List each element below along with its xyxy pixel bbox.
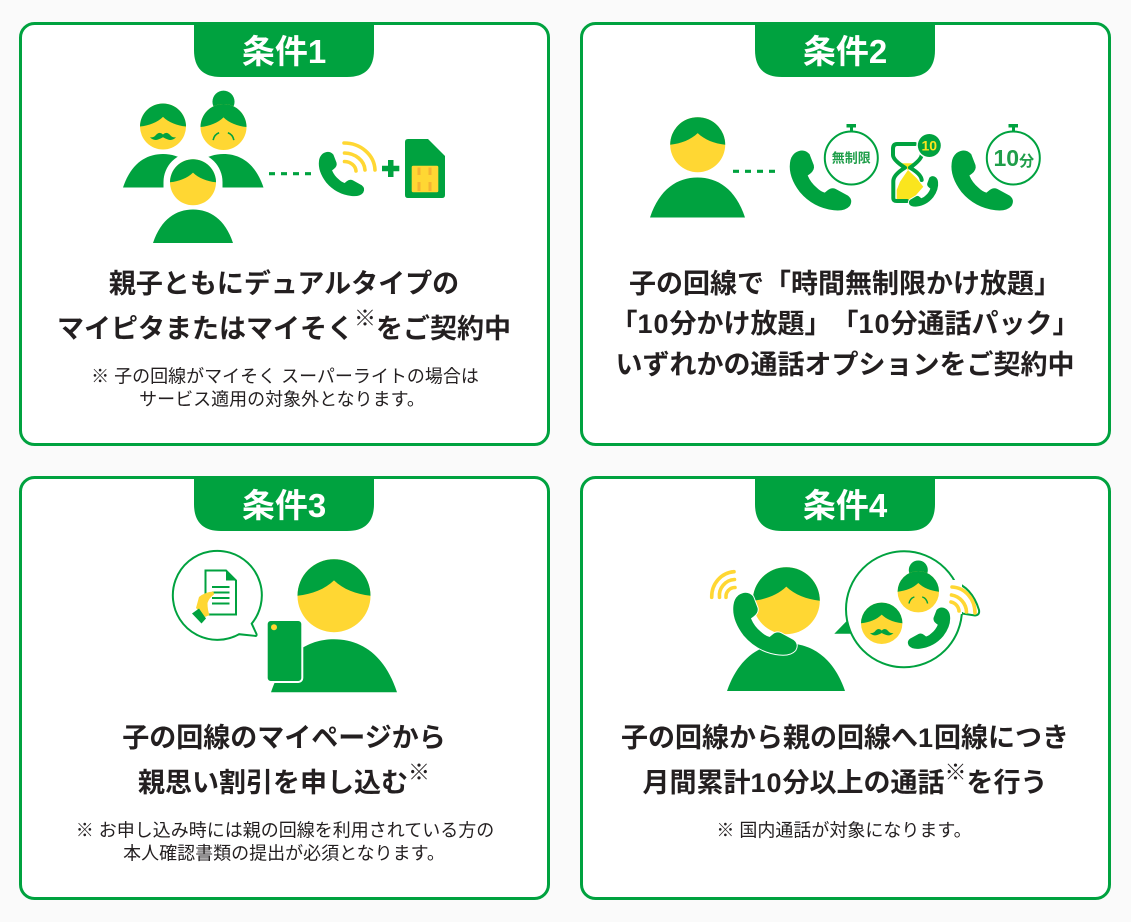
stopwatch: 10 minutes: [987, 124, 1040, 184]
heading: 「10分かけ放題」「10分通話パック」: [610, 309, 1080, 339]
dashed connector: [269, 172, 311, 175]
heading: 月間累計10分以上の通話: [642, 768, 945, 798]
panel: condition 1: [20, 23, 548, 444]
hand holding document: [192, 592, 214, 624]
note: ※ お申し込み時には親の回線を利用されている方の: [76, 820, 494, 840]
heading line 2: ※: [408, 760, 430, 785]
speech bubble: [834, 551, 979, 667]
signal waves: [344, 143, 375, 171]
phone: [790, 150, 851, 211]
mother head: [898, 560, 939, 612]
document: [206, 570, 236, 614]
heading: ※: [945, 760, 967, 785]
note: [76, 820, 494, 864]
tab: condition 3: [194, 477, 374, 531]
mother body: [184, 154, 264, 188]
icon: child with call options: [650, 117, 1040, 218]
speech bubble: [173, 551, 262, 640]
heading line 2: マイピタまたはマイそく: [57, 314, 354, 344]
dashed connector: [733, 170, 775, 173]
hourglass: 10 minutes: 10: [922, 138, 937, 154]
hourglass: 10 minutes: [893, 132, 942, 207]
tab: condition 2: 条件2: [803, 33, 887, 70]
panel: condition 4: [582, 477, 1110, 898]
frame: [893, 144, 922, 201]
icon: child calling parent: [712, 551, 979, 691]
child head: [170, 159, 216, 205]
child head halo: [164, 152, 222, 190]
stopwatch: unlimited: [825, 124, 878, 184]
phone: [319, 152, 364, 196]
note: [91, 366, 479, 410]
person: [727, 567, 845, 691]
phone: [908, 608, 950, 649]
panel: condition 3: [20, 477, 548, 898]
note: 本人確認書類の提出が必須となります。: [123, 844, 445, 864]
small phone: [908, 176, 939, 207]
heading: [610, 269, 1080, 380]
smartphone: [267, 620, 302, 682]
tab: condition 3: 条件3: [242, 487, 326, 524]
heading line 2: ※: [354, 306, 376, 331]
heading: を行う: [967, 768, 1048, 798]
heading: 子の回線から親の回線へ1回線につき: [621, 723, 1069, 753]
plus: [382, 160, 399, 177]
tab: condition 4: 条件4: [803, 487, 888, 524]
heading line 2: をご契約中: [376, 313, 511, 344]
person: [271, 559, 397, 692]
heading: 親子ともにデュアルタイプの: [109, 268, 459, 299]
phone: [951, 150, 1013, 211]
icon: family with dual type SIM: [123, 91, 445, 243]
icon: application from my page: [173, 551, 397, 692]
signal waves right: [951, 587, 975, 613]
heading: 子の回線で「時間無制限かけ放題」: [629, 269, 1061, 299]
note: サービス適用の対象外となります。: [139, 390, 425, 410]
child body: [153, 210, 233, 243]
SIM card: [405, 139, 445, 198]
tab: condition 1: [194, 23, 374, 77]
heading: いずれかの通話オプションをご契約中: [616, 349, 1074, 380]
mother head: [200, 91, 246, 150]
father body: [123, 154, 203, 188]
note: ※ 子の回線がマイそく スーパーライトの場合は: [91, 366, 479, 386]
signal waves left: [712, 572, 735, 597]
heading: [621, 723, 1069, 798]
sand: [897, 163, 923, 201]
heading line 2: 親思い割引を申し込む: [138, 768, 408, 798]
person: [650, 117, 745, 218]
stopwatch: unlimited: 無制限: [832, 150, 871, 166]
father head: [861, 603, 902, 644]
tab: condition 4: [755, 477, 935, 531]
note: ※ 国内通話が対象になります。: [716, 820, 972, 840]
phone: [733, 592, 797, 655]
tab: condition 2: [755, 23, 935, 77]
badge: [916, 132, 942, 158]
panel: condition 2: [582, 23, 1110, 444]
tab: condition 1: 条件1: [242, 33, 326, 70]
father head: [140, 104, 186, 150]
heading: 子の回線のマイページから: [122, 723, 446, 753]
stopwatch: 10 minutes: 10分: [993, 145, 1034, 171]
